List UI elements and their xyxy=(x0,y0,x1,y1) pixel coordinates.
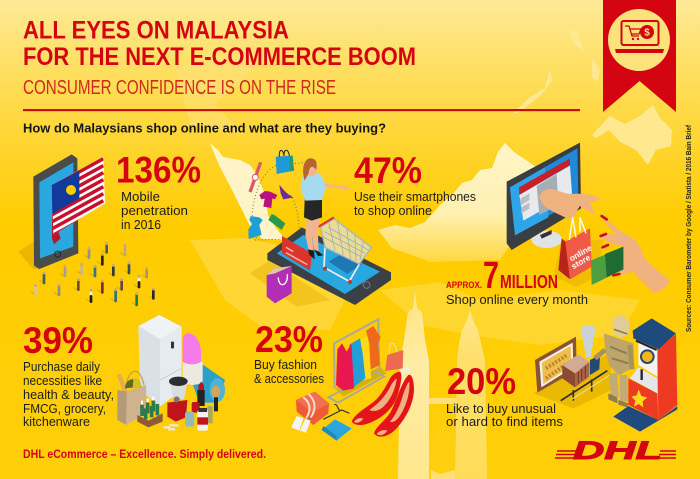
credit card xyxy=(282,236,312,271)
icon: laptop with cart: $ xyxy=(644,28,650,38)
shopping bag purple xyxy=(267,266,292,303)
stat: fashion xyxy=(254,319,324,386)
background map and towers xyxy=(176,28,672,479)
stat: fashion: 23% xyxy=(255,319,323,360)
hand with card xyxy=(600,215,670,293)
stat: fashion: Buy fashion xyxy=(254,358,317,372)
tablet stand xyxy=(590,355,600,375)
DHL logo: DHL xyxy=(573,437,662,465)
yoga roll xyxy=(190,365,225,403)
stat: smartphones xyxy=(354,150,476,218)
cosmetics xyxy=(163,382,218,431)
stat: unusual items: or hard to find items xyxy=(446,415,563,429)
flag xyxy=(52,157,105,244)
subtitle: CONSUMER CONFIDENCE IS ON THE RISE xyxy=(23,77,336,99)
stat: unusual items xyxy=(446,361,563,429)
blender xyxy=(167,377,188,422)
stat: fashion: & accessories xyxy=(254,372,324,386)
stat: smartphones: Use their smartphones xyxy=(354,190,476,204)
clothes rack xyxy=(328,319,384,403)
credit card green xyxy=(591,247,623,285)
stat: daily necessities: 39% xyxy=(23,320,93,361)
divider line xyxy=(23,109,580,111)
crowd of people xyxy=(32,242,155,306)
stat: smartphones: 47% xyxy=(354,150,422,191)
title: FOR THE NEXT E-COMMERCE BOOM xyxy=(23,43,416,71)
stat: smartphones: to shop online xyxy=(354,204,432,218)
icon: shopping bag blue xyxy=(276,150,294,174)
reaching hand xyxy=(539,189,601,219)
fridge xyxy=(138,315,182,407)
question heading: How do Malaysians shop online and what are they buying? xyxy=(23,120,386,136)
red heels xyxy=(352,367,414,437)
grocery bag xyxy=(117,371,147,425)
smartphone platform xyxy=(267,227,391,305)
stat: mobile penetration: Mobile xyxy=(121,190,160,204)
icon: blue dress xyxy=(248,216,263,239)
stat: daily necessities: kitchenware xyxy=(23,415,90,429)
woman xyxy=(301,158,348,259)
books xyxy=(562,354,589,387)
illustration: household goods xyxy=(117,315,225,431)
stat: 7 million: APPROX. xyxy=(446,280,482,290)
illustration: computer with hands xyxy=(507,143,670,293)
tagline: DHL eCommerce – Excellence. Simply delivered. xyxy=(23,447,266,461)
icon: purple heels xyxy=(279,185,293,199)
stat: 7 million: MILLION xyxy=(500,272,558,292)
icon: green dress xyxy=(268,214,285,230)
bag: online store: online xyxy=(567,242,594,263)
ribbon badge xyxy=(603,0,676,112)
stat: mobile penetration xyxy=(116,150,201,232)
stat: mobile penetration: penetration xyxy=(121,204,188,218)
stat: daily necessities: Purchase daily xyxy=(23,360,101,374)
title xyxy=(23,16,416,71)
title: ALL EYES ON MALAYSIA xyxy=(23,16,289,44)
lipstick xyxy=(183,333,203,385)
monitor xyxy=(507,143,581,250)
sword display xyxy=(561,371,607,401)
dotted path xyxy=(252,163,303,240)
stat: daily necessities: health & beauty, xyxy=(23,388,114,402)
icon: watch xyxy=(250,162,261,192)
shopping bag salmon xyxy=(385,343,403,371)
arcade machine xyxy=(613,318,677,432)
stat: 7 million xyxy=(446,255,588,307)
shopping cart xyxy=(317,217,371,284)
nails xyxy=(601,216,619,275)
bag: online store xyxy=(558,217,594,279)
stat: 7 million: Shop online every month xyxy=(446,293,588,307)
stat: mobile penetration: in 2016 xyxy=(121,218,161,232)
stat: mobile penetration: 136% xyxy=(116,150,201,190)
dresses xyxy=(366,326,381,369)
stat: daily necessities xyxy=(23,320,114,429)
stat: daily necessities: necessities like xyxy=(23,374,102,388)
stat: daily necessities: FMCG, grocery, xyxy=(23,402,106,416)
illustration: collectibles and arcade machine xyxy=(533,315,677,432)
icon: magenta top xyxy=(259,191,277,208)
stat: 7 million: 7 xyxy=(483,255,499,297)
framed picture xyxy=(535,337,577,393)
blue shirt and hanger xyxy=(322,404,352,441)
illustration: fashion items xyxy=(291,319,414,441)
vase xyxy=(581,325,595,357)
source note: Sources: Consumer Barometer by Google / Statista / 2016 Bain Brief xyxy=(684,125,693,332)
sneakers xyxy=(291,416,311,433)
bag: online store: store xyxy=(569,252,592,271)
bottle crate xyxy=(137,397,163,427)
stat: unusual items: 20% xyxy=(447,361,516,402)
DHL logo xyxy=(555,437,676,465)
robot xyxy=(595,315,634,407)
illustration: shopper on smartphone xyxy=(248,150,391,307)
shoe box xyxy=(296,392,329,425)
icon: smartphone with Malaysian flag xyxy=(18,154,105,269)
stat: unusual items: Like to buy unusual xyxy=(446,402,556,416)
